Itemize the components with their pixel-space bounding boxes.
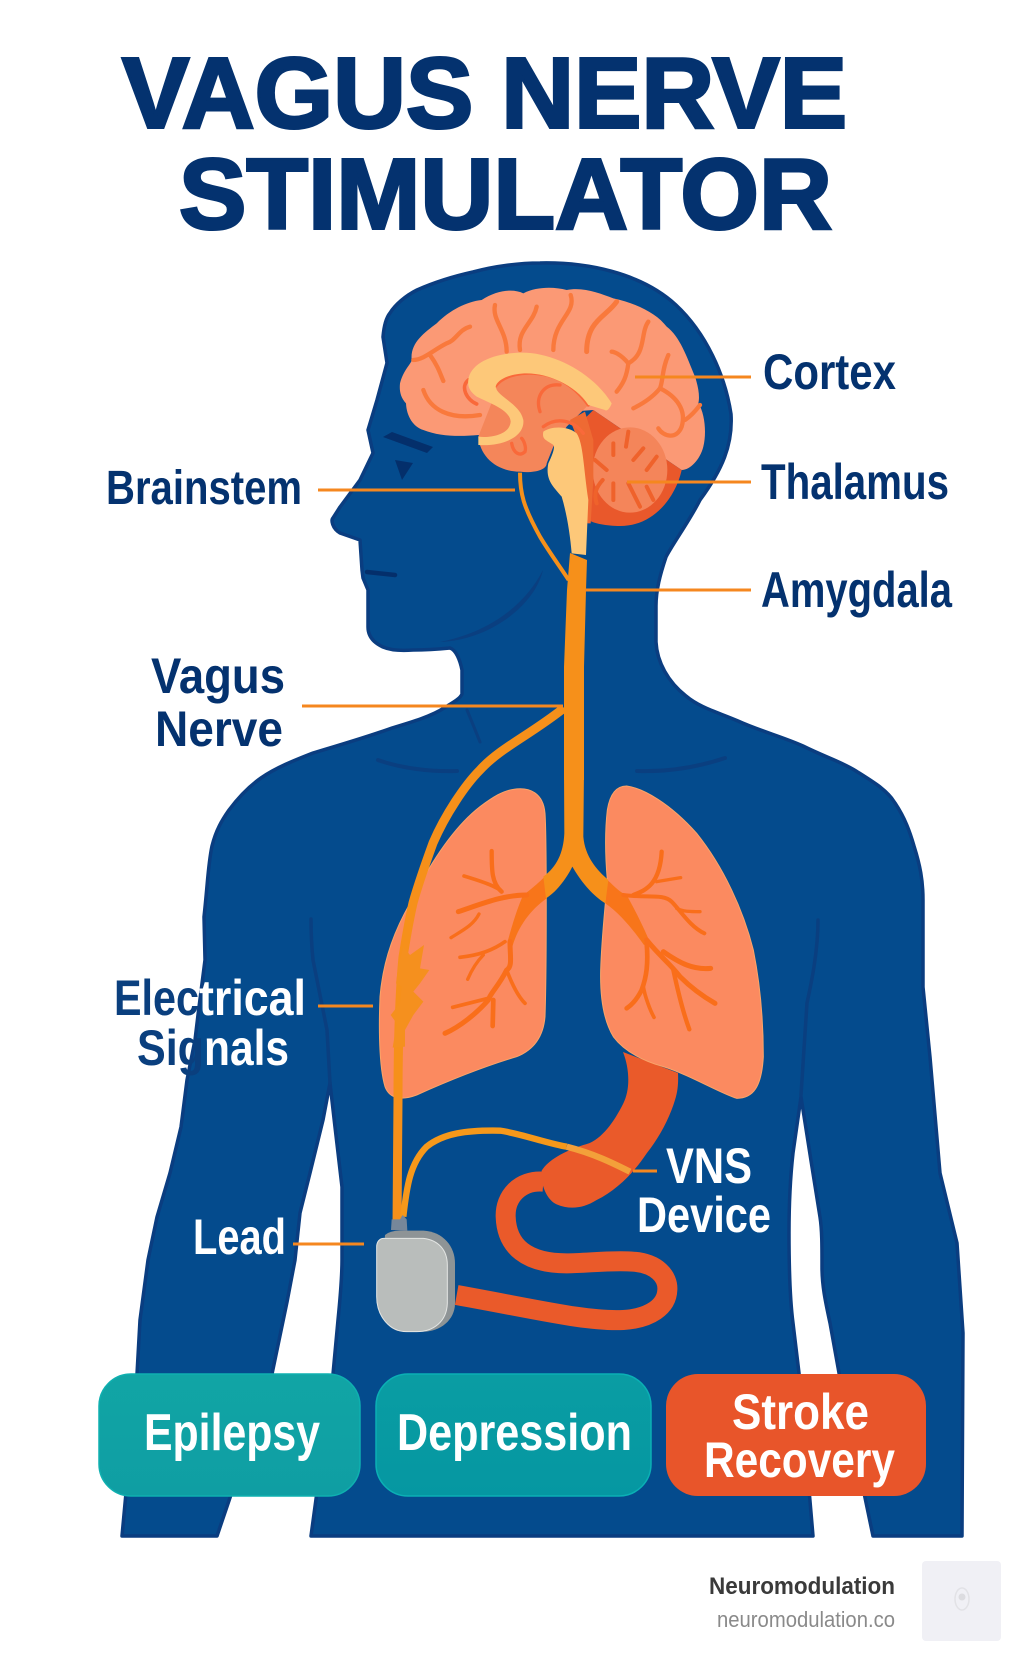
- footer brand name: Neuromodulation: [709, 1573, 895, 1600]
- left vagus branch to the device: [397, 708, 564, 1225]
- title: STIMULATOR: [179, 138, 832, 250]
- label: Electrical Signals: Sig: [137, 1020, 204, 1076]
- neck line: [467, 710, 480, 742]
- lead wire over stomach: [567, 1147, 630, 1172]
- VNS device and lead: [377, 1131, 630, 1332]
- label: Electrical Signals: trical: [199, 970, 306, 1026]
- vagus nerve line: [302, 704, 563, 708]
- intestine: [457, 1182, 667, 1320]
- inner brain lines: [465, 373, 588, 454]
- button: Stroke Recovery: Recovery: [704, 1432, 895, 1488]
- trachea fork: [543, 770, 608, 903]
- right collarbone: [637, 758, 725, 771]
- cortex line: [635, 376, 751, 378]
- label: Electrical Signals: Elec: [114, 970, 199, 1026]
- body contour details and face: [311, 432, 818, 1095]
- label: Thalamus: Thalamus: [761, 454, 949, 510]
- device case back: [380, 1231, 455, 1332]
- mouth: [367, 572, 395, 575]
- corpus callosum: [468, 353, 612, 445]
- label: Lead: Lead: [193, 1209, 286, 1265]
- footer logo: [922, 1561, 1001, 1641]
- thalamus line: [627, 480, 751, 484]
- brainstem: [543, 427, 588, 555]
- button: Epilepsy: Epilepsy: [144, 1404, 320, 1462]
- electrical signals lightning bolt: [391, 945, 429, 1048]
- label: Cortex: Cortex: [763, 344, 896, 400]
- sulci: [413, 295, 700, 436]
- label: Vagus Nerve: [151, 648, 285, 757]
- brain: [400, 288, 705, 580]
- label: VNS Device: Device: [637, 1187, 771, 1243]
- label: Vagus Nerve: Vagus: [151, 648, 285, 704]
- label: Amygdala: Amygdala: [761, 562, 953, 618]
- stomach: [541, 1052, 678, 1208]
- cerebellum core: [593, 427, 667, 513]
- label: Electrical Signals: nals: [204, 1020, 289, 1076]
- inner brain: [478, 373, 588, 472]
- brainstem line: [318, 488, 515, 492]
- right arm line: [801, 920, 818, 1095]
- electrical signals line: [318, 1004, 373, 1008]
- right bronchi: [605, 852, 715, 1029]
- amygdala line: [585, 588, 751, 592]
- label: Electrical Signals: [114, 970, 306, 1076]
- nerve trunk in the neck: [564, 553, 587, 780]
- button: Depression: [376, 1374, 651, 1496]
- lead wire: [403, 1131, 567, 1217]
- orange strip beside the brainstem: [570, 412, 593, 523]
- vns device line: [633, 1170, 657, 1172]
- cortex: [400, 288, 705, 470]
- jaw shadow: [440, 570, 543, 642]
- label: Brainstem: Brainstem: [106, 462, 302, 515]
- vagus fibre from brainstem: [520, 473, 569, 580]
- human silhouette: [122, 263, 963, 1536]
- right lung: [601, 786, 763, 1098]
- eyebrow: [383, 432, 433, 453]
- label: VNS Device: [637, 1138, 771, 1243]
- lead line: [293, 1242, 364, 1246]
- left lung: [379, 789, 546, 1098]
- vagus branch and lightning: [391, 553, 587, 1225]
- eye: [395, 460, 413, 480]
- left bronchi: [445, 851, 547, 1033]
- left arm line: [311, 919, 330, 1083]
- device case front: [377, 1238, 447, 1332]
- button: Depression: Depression: [397, 1404, 632, 1462]
- stomach and esophagus: [457, 1052, 678, 1320]
- lungs: [379, 770, 763, 1098]
- title: VAGUS NERVE: [122, 38, 847, 150]
- left collarbone: [378, 760, 457, 771]
- title: [122, 38, 847, 250]
- button: Stroke Recovery: Stroke: [732, 1384, 869, 1440]
- cerebellum folds: [595, 432, 657, 507]
- label: VNS Device: VNS: [666, 1138, 752, 1194]
- cerebellum shell: [583, 410, 682, 526]
- button: Stroke Recovery: [666, 1374, 926, 1496]
- callout lines: [293, 377, 751, 1244]
- label: Vagus Nerve: Nerve: [155, 701, 283, 757]
- footer url: neuromodulation.co: [717, 1607, 895, 1632]
- button: Epilepsy: [99, 1374, 360, 1496]
- connector: [391, 1215, 407, 1231]
